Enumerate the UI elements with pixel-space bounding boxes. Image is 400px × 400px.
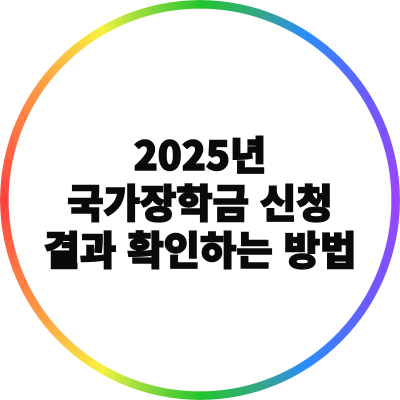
title: 2025년 xyxy=(134,125,266,182)
title xyxy=(44,125,356,277)
title: 결과 확인하는 방법 xyxy=(44,220,356,277)
title: 국가장학금 신청 xyxy=(67,172,333,230)
